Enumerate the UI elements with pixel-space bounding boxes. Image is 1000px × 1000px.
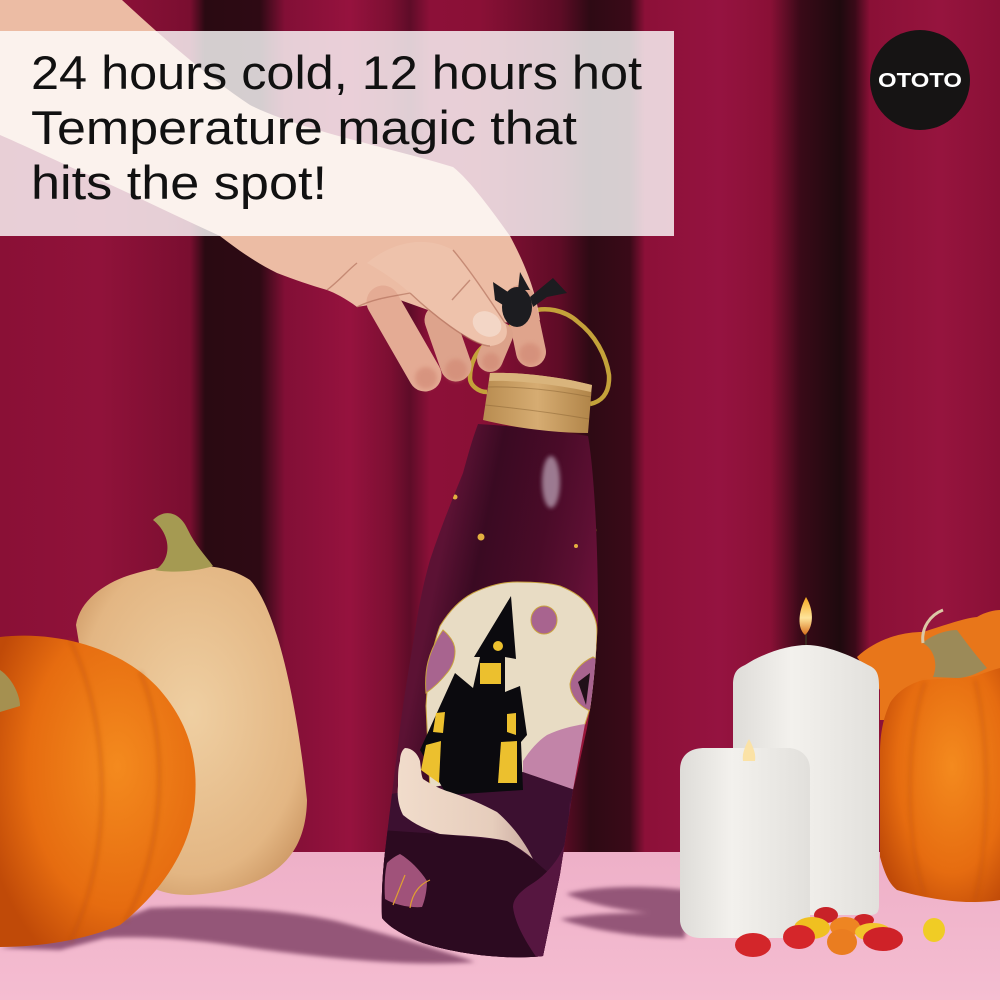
logo — [870, 30, 970, 130]
bottle body — [382, 424, 598, 957]
fingertip shading — [415, 343, 541, 389]
bottle artwork — [375, 456, 600, 965]
house windows — [421, 641, 517, 783]
dark ground lower — [375, 830, 560, 965]
tall candle with flame — [733, 597, 879, 915]
haunted house — [420, 596, 527, 795]
middle finger — [440, 320, 456, 366]
moon crater: top — [531, 606, 557, 634]
purple path — [513, 800, 571, 958]
ring finger — [490, 335, 500, 359]
right finger — [520, 300, 531, 352]
logo: OTOTO — [878, 70, 962, 92]
index finger — [383, 302, 425, 375]
bamboo lid — [483, 373, 592, 433]
caption text — [31, 46, 642, 209]
pumpkin: beige squash — [76, 513, 307, 895]
moon crater: right — [570, 657, 598, 712]
jelly beans — [735, 907, 945, 957]
gold ring handle — [470, 309, 609, 404]
thumb nail — [468, 306, 506, 342]
pink hill — [523, 724, 585, 790]
stars — [452, 494, 600, 548]
hand — [0, 0, 541, 389]
bat charm — [493, 272, 567, 327]
bottle — [375, 373, 600, 965]
pumpkin: large orange left — [0, 636, 196, 947]
thumb — [367, 242, 507, 346]
ghost — [398, 748, 533, 859]
caption text: 24 hours cold, 12 hours hot — [31, 46, 642, 99]
pumpkin: right — [857, 610, 1000, 902]
pink table — [0, 852, 1000, 1000]
pink bush — [385, 854, 427, 907]
caption panel — [0, 31, 674, 236]
bottle highlight — [542, 456, 560, 508]
moon crater: left — [426, 630, 455, 693]
caption text: Temperature magic that — [31, 101, 577, 154]
palm and arm — [0, 0, 540, 325]
finger creases — [327, 250, 505, 346]
moon — [426, 582, 597, 790]
short candle with flame — [680, 739, 810, 938]
dark ground upper — [375, 772, 575, 965]
caption text: hits the spot! — [31, 156, 327, 209]
table shadows — [0, 887, 685, 964]
